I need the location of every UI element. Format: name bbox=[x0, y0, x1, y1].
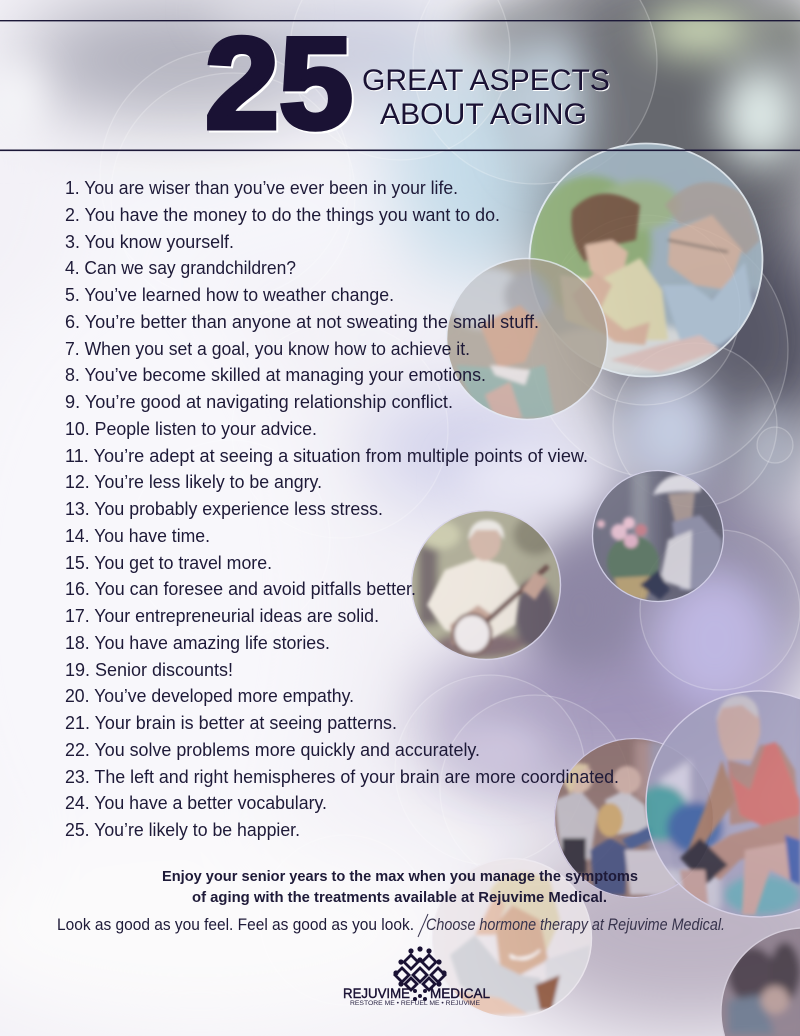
photo bubble: smiling blonde woman bbox=[432, 858, 592, 1018]
list of 25 aspects: 4. Can we say grandchildren? bbox=[65, 258, 296, 278]
list of 25 aspects: 18. You have amazing life stories. bbox=[65, 633, 330, 653]
tagline: Look as good as you feel. Feel as good as you look. bbox=[57, 916, 414, 934]
list of 25 aspects: 25. You’re likely to be happier. bbox=[65, 820, 300, 840]
list of 25 aspects: 11. You’re adept at seeing a situation from multiple points of view. bbox=[65, 446, 588, 466]
title words bbox=[362, 64, 611, 132]
closing message: of aging with the treatments available at Rejuvime Medical. bbox=[192, 889, 607, 906]
logo lattice mark bbox=[393, 946, 447, 1001]
header rules bbox=[0, 20, 800, 151]
photo bubble: woman gardening bbox=[592, 470, 724, 602]
title words: GREAT ASPECTS bbox=[363, 65, 611, 98]
title number: 25 bbox=[205, 10, 353, 156]
title words: ABOUT AGING bbox=[380, 98, 587, 131]
list of 25 aspects: 24. You have a better vocabulary. bbox=[65, 793, 327, 813]
list of 25 aspects: 17. Your entrepreneurial ideas are solid. bbox=[65, 606, 379, 626]
closing message: Enjoy your senior years to the max when you manage the symptoms bbox=[162, 868, 638, 885]
photo bubble: family at table bbox=[554, 738, 714, 898]
logo: Rejuvime Medical bbox=[343, 946, 490, 1007]
logo: Rejuvime Medical: REJUVIME bbox=[343, 986, 410, 1001]
list of 25 aspects: 8. You’ve become skilled at managing your emotions. bbox=[65, 365, 486, 385]
photo bubble: man with banjo bbox=[411, 510, 561, 660]
title bbox=[205, 10, 611, 158]
logo: Rejuvime Medical: RESTORE ME • REFUEL ME • REJUVIME bbox=[350, 1001, 480, 1007]
list of 25 aspects: 15. You get to travel more. bbox=[65, 553, 272, 573]
tagline bbox=[57, 914, 725, 937]
list of 25 aspects bbox=[65, 178, 619, 840]
closing message bbox=[162, 868, 638, 906]
list of 25 aspects: 9. You’re good at navigating relationship conflict. bbox=[65, 392, 453, 412]
list of 25 aspects: 5. You’ve learned how to weather change. bbox=[65, 285, 394, 305]
list of 25 aspects: 2. You have the money to do the things you want to do. bbox=[65, 205, 500, 225]
photo bubble: older man at gym bbox=[633, 691, 800, 917]
logo: Rejuvime Medical: MEDICAL bbox=[430, 986, 490, 1001]
list of 25 aspects: 6. You’re better than anyone at not sweating the small stuff. bbox=[65, 312, 539, 332]
list of 25 aspects: 23. The left and right hemispheres of your brain are more coordinated. bbox=[65, 767, 619, 787]
list of 25 aspects: 10. People listen to your advice. bbox=[65, 419, 317, 439]
list of 25 aspects: 7. When you set a goal, you know how to achieve it. bbox=[65, 339, 470, 359]
list of 25 aspects: 20. You’ve developed more empathy. bbox=[65, 686, 354, 706]
title number: 25 bbox=[207, 12, 355, 158]
list of 25 aspects: 16. You can foresee and avoid pitfalls better. bbox=[65, 579, 416, 599]
list of 25 aspects: 14. You have time. bbox=[65, 526, 210, 546]
list of 25 aspects: 13. You probably experience less stress. bbox=[65, 499, 383, 519]
photo bubble: elderly couple bbox=[445, 258, 608, 420]
title words: GREAT ASPECTS bbox=[362, 64, 610, 97]
tagline: Choose hormone therapy at Rejuvime Medical. bbox=[426, 916, 725, 934]
list of 25 aspects: 21. Your brain is better at seeing patterns. bbox=[65, 713, 397, 733]
title words: ABOUT AGING bbox=[381, 99, 588, 132]
list of 25 aspects: 22. You solve problems more quickly and accurately. bbox=[65, 740, 480, 760]
list of 25 aspects: 12. You’re less likely to be angry. bbox=[65, 472, 322, 492]
list of 25 aspects: 19. Senior discounts! bbox=[65, 660, 233, 680]
list of 25 aspects: 1. You are wiser than you’ve ever been in your life. bbox=[65, 178, 458, 198]
list of 25 aspects: 3. You know yourself. bbox=[65, 232, 234, 252]
photo bubble: couple bottom right bbox=[721, 928, 800, 1036]
photo bubble: boy and grandmother bbox=[528, 142, 764, 378]
